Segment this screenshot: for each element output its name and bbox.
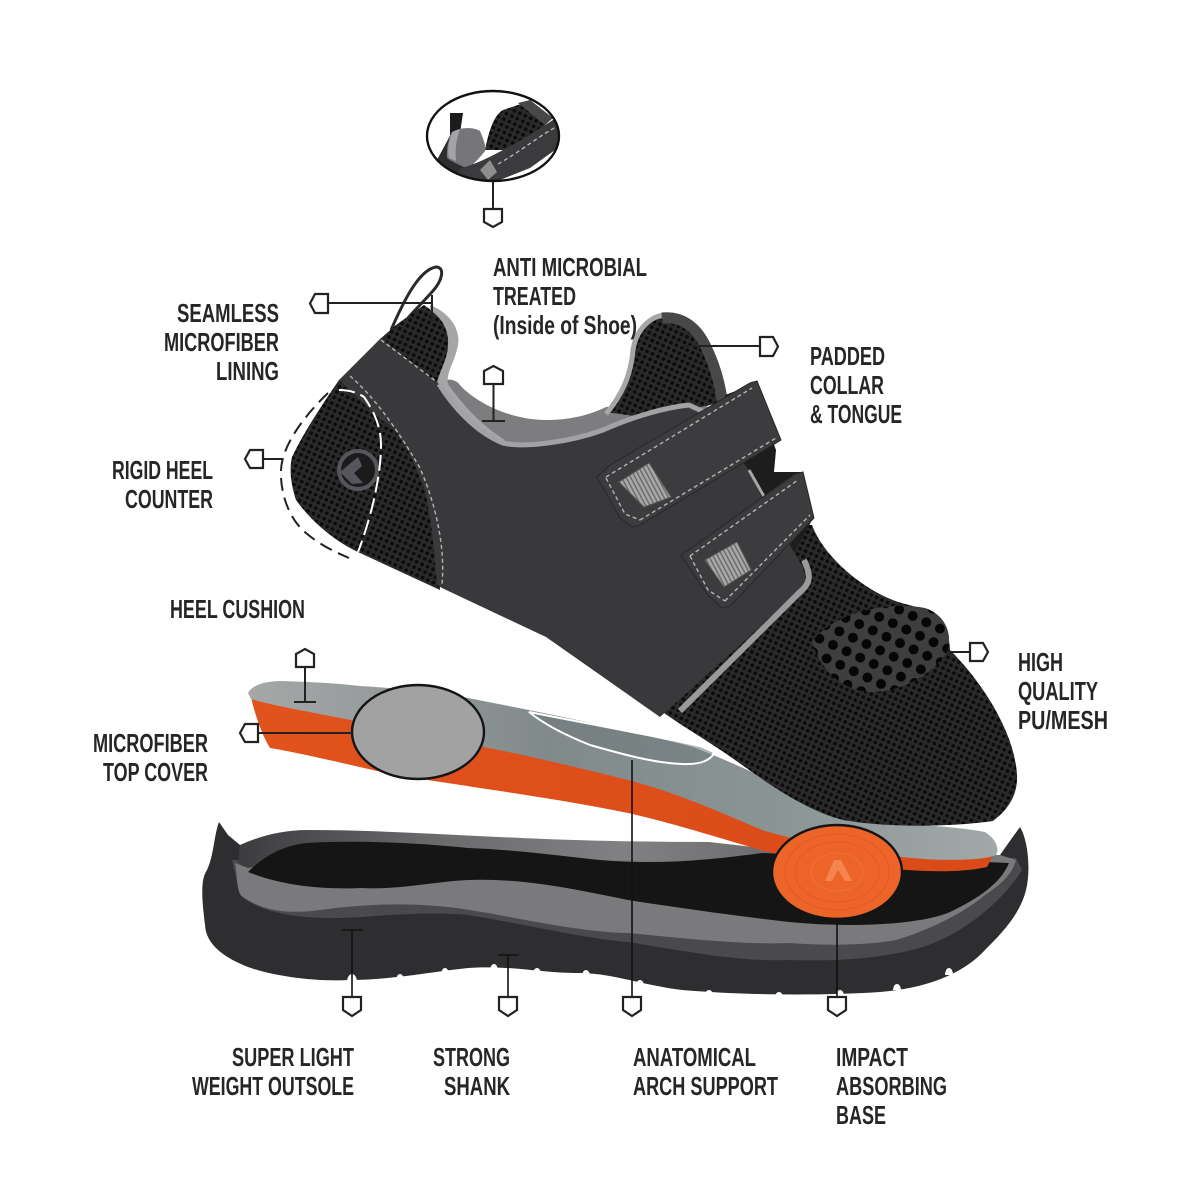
label: impact absorbing base: BASE	[836, 1100, 886, 1130]
heel rim inner wall	[238, 830, 790, 872]
material swatch: microfiber top cover	[352, 685, 484, 779]
leather body	[339, 338, 806, 717]
tongue lining edge	[606, 315, 665, 414]
strap tag	[619, 463, 671, 507]
label: strong shank: STRONG	[433, 1042, 510, 1072]
large mesh swatch	[812, 606, 949, 692]
label: high quality pu mesh: HIGH	[1018, 647, 1063, 677]
label: impact absorbing base	[836, 1042, 947, 1130]
callout: padded collar marker	[681, 337, 778, 356]
heel counter inner dash	[339, 390, 381, 552]
interior lining	[438, 380, 715, 452]
callout: outsole marker	[342, 930, 363, 1016]
label: super light weight outsole: SUPER LIGHT	[232, 1042, 354, 1072]
label: microfiber top cover: TOP COVER	[103, 757, 208, 787]
label: super light weight outsole: WEIGHT OUTSOLE	[192, 1071, 354, 1101]
label: anti microbial treated	[493, 252, 647, 340]
callout: arch support marker	[623, 760, 641, 1016]
label: rigid heel counter: RIGID HEEL	[112, 455, 213, 485]
tongue mesh	[605, 318, 724, 418]
callout: seamless lining marker	[310, 294, 432, 322]
label: microfiber top cover: MICROFIBER	[93, 728, 208, 758]
label: seamless microfiber lining: LINING	[216, 356, 279, 386]
tread notches	[347, 947, 993, 997]
midsole band	[232, 858, 1022, 960]
label: microfiber top cover	[93, 728, 208, 787]
label: anti microbial treated: TREATED	[493, 281, 576, 311]
tongue strip	[662, 318, 722, 400]
insole	[248, 681, 997, 871]
callout: high quality mesh marker	[947, 643, 988, 661]
label: padded collar and tongue	[810, 341, 902, 429]
strap 2	[681, 472, 814, 608]
label: padded collar and tongue: COLLAR	[810, 370, 884, 400]
collar lining	[430, 305, 505, 448]
label: anatomical arch support	[633, 1042, 778, 1101]
body stitching	[350, 376, 443, 585]
label: padded collar and tongue: & TONGUE	[810, 399, 902, 429]
inset: inside of shoe oval	[427, 91, 562, 184]
callout: inside of shoe marker	[482, 366, 505, 421]
heel counter mesh	[291, 380, 440, 590]
label: strong shank	[433, 1042, 510, 1101]
label: strong shank: SHANK	[444, 1071, 510, 1101]
label: impact absorbing base: ABSORBING	[836, 1071, 947, 1101]
orange foam layer	[251, 697, 995, 871]
mesh behind straps	[725, 385, 812, 560]
heel collar mesh	[379, 305, 452, 395]
label: anti microbial treated: (Inside of Shoe)	[493, 310, 637, 340]
arch support outline	[529, 712, 714, 764]
label: anti microbial treated: ANTI MICROBIAL	[493, 252, 647, 282]
grey top cover	[248, 681, 997, 860]
label: anatomical arch support: ANATOMICAL	[633, 1042, 756, 1072]
label: high quality pu mesh: QUALITY	[1018, 676, 1098, 706]
label: rigid heel counter	[112, 455, 213, 514]
strap tag	[705, 542, 751, 587]
callout: anti microbial inset marker	[484, 181, 502, 227]
label: high quality pu mesh: PU/MESH	[1018, 705, 1108, 735]
vamp trim	[680, 560, 809, 711]
label: high quality pu mesh	[1018, 647, 1108, 735]
grey lining along throat	[439, 384, 704, 445]
outsole and midsole	[202, 822, 1028, 997]
detail circle: impact absorbing base	[772, 825, 902, 919]
pull loop	[391, 267, 442, 330]
label: seamless microfiber lining: MICROFIBER	[164, 327, 279, 357]
label: impact absorbing base: IMPACT	[836, 1042, 908, 1072]
callout: rigid heel counter marker	[245, 450, 282, 468]
label: anatomical arch support: ARCH SUPPORT	[633, 1071, 778, 1101]
label: super light weight outsole	[192, 1042, 354, 1101]
logo ring	[339, 451, 377, 489]
label: rigid heel counter: COUNTER	[125, 484, 213, 514]
label: seamless microfiber lining: SEAMLESS	[177, 298, 279, 328]
label: padded collar and tongue: PADDED	[810, 341, 885, 371]
callout: microfiber top cover marker	[240, 724, 352, 742]
callout: shank marker	[498, 955, 519, 1016]
label: seamless microfiber lining	[164, 298, 279, 386]
black footbed	[248, 842, 1009, 925]
callout: heel cushion marker	[294, 649, 316, 702]
outsole body	[202, 822, 1028, 994]
toe mesh	[640, 525, 1017, 826]
heel counter outline	[281, 393, 349, 558]
strap 1	[597, 381, 781, 527]
callout: impact base marker	[828, 919, 846, 1016]
shoe upper	[281, 267, 1017, 826]
grey foam band	[235, 855, 1016, 945]
label: heel cushion: HEEL CUSHION	[170, 594, 305, 624]
trim between straps	[749, 470, 766, 500]
